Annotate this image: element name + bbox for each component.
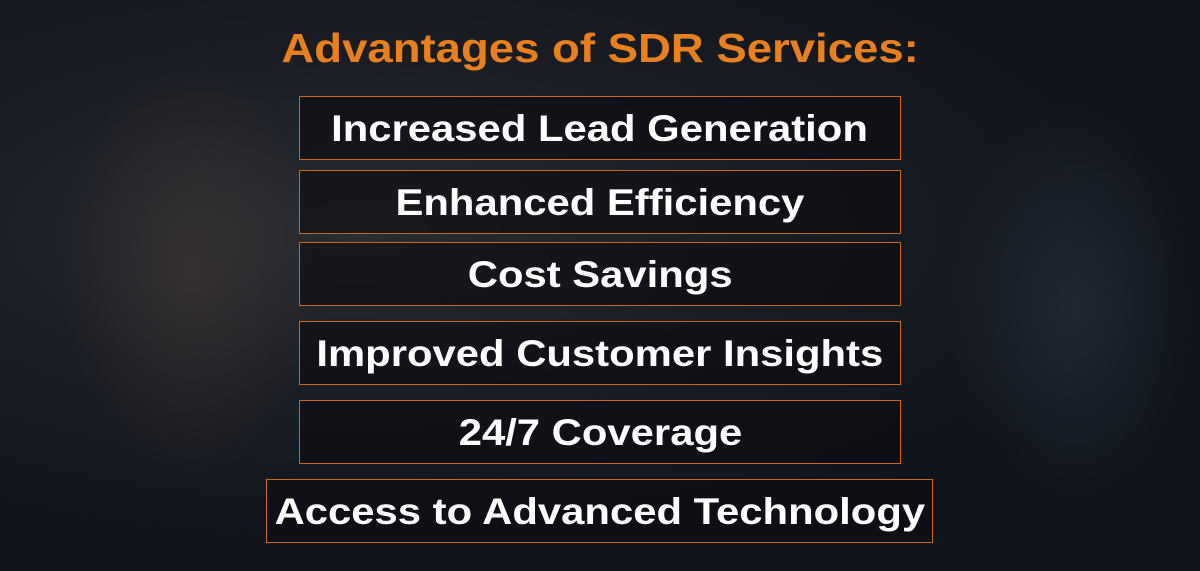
box: Increased Lead Generation xyxy=(299,96,901,160)
box: Cost Savings: Cost Savings xyxy=(468,254,732,295)
box: Improved Customer Insights xyxy=(299,321,901,385)
box: Improved Customer Insights: Improved Customer Insights xyxy=(317,333,883,374)
box: Enhanced Efficiency xyxy=(299,170,901,234)
box: Access to Advanced Technology xyxy=(266,479,933,543)
box: Access to Advanced Technology: Access to Advanced Technology xyxy=(274,491,925,532)
box: Enhanced Efficiency: Enhanced Efficiency xyxy=(396,182,804,223)
box: 24/7 Coverage: 24/7 Coverage xyxy=(458,412,742,453)
box: Cost Savings xyxy=(299,242,901,306)
box: 24/7 Coverage xyxy=(299,400,901,464)
title: Advantages of SDR Services: xyxy=(281,25,919,71)
box: Increased Lead Generation: Increased Lead Generation xyxy=(332,108,868,149)
